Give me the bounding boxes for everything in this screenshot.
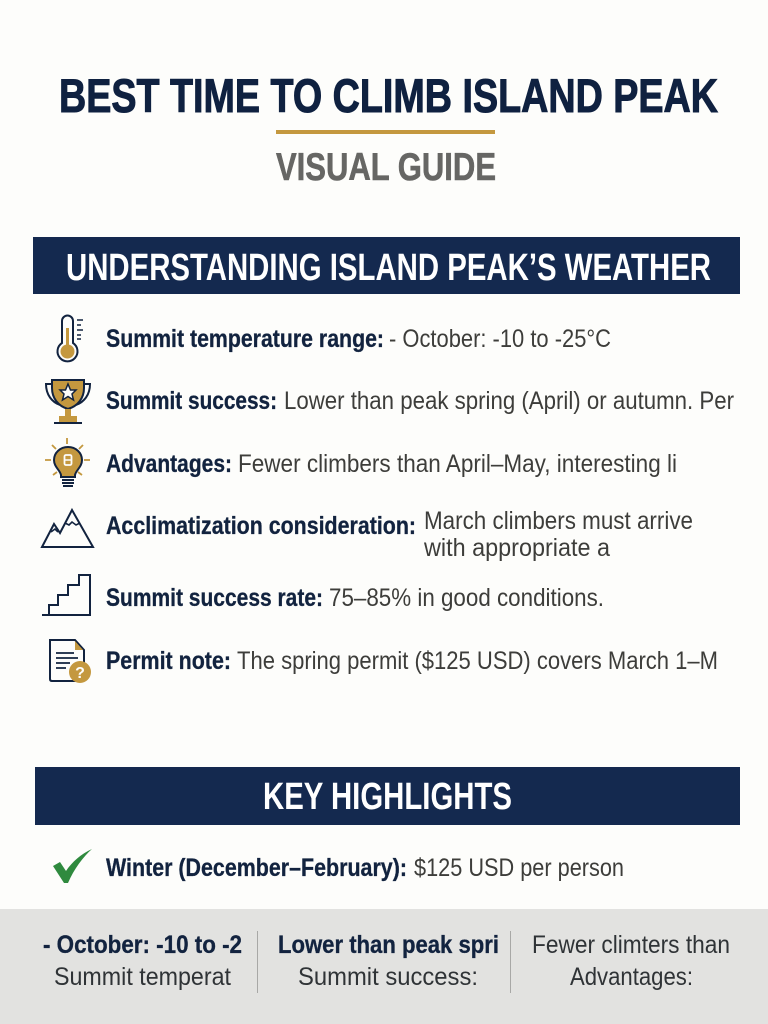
footer band <box>0 909 768 1024</box>
footer stat: summit temperature: - October: -10 to -2 <box>43 931 242 959</box>
row: advantages: Fewer climbers than April–May, interesting li <box>238 450 677 478</box>
highlight: winter permit cost <box>106 854 624 882</box>
section heading: key highlights: KEY HIGHLIGHTS <box>263 776 512 818</box>
icon: permit document <box>50 640 91 683</box>
footer stat: advantages <box>532 931 730 991</box>
row: permit note: The spring permit ($125 USD) covers March 1–M <box>237 647 718 675</box>
subtitle: VISUAL GUIDE <box>276 146 496 189</box>
row: acclimatization consideration <box>106 507 693 562</box>
row: acclimatization consideration: Acclimatization consideration: <box>106 512 416 540</box>
footer stat: summit success: Lower than peak spri <box>278 931 499 959</box>
title accent rule <box>276 130 495 134</box>
section heading: key highlights <box>35 767 740 825</box>
row: acclimatization consideration: with appropriate a <box>423 534 610 562</box>
row: summit success: Summit success: <box>106 387 277 415</box>
footer stat: summit temperature <box>43 931 242 991</box>
row: summit temperature range: - October: -10 to -25°C <box>389 325 611 353</box>
row: advantages: Advantages: <box>106 450 232 478</box>
row: acclimatization consideration: March climbers must arrive <box>424 507 693 535</box>
footer stat: advantages: Fewer climters than <box>532 931 730 959</box>
row: summit success rate <box>106 584 604 612</box>
footer stat: summit success: Summit success: <box>298 963 478 991</box>
icon: thermometer <box>58 316 83 361</box>
section heading: weather <box>33 237 740 294</box>
row: summit success rate: Summit success rate: <box>106 584 323 612</box>
row: summit success rate: 75–85% in good conditions. <box>329 584 604 612</box>
row: permit note: Permit note: <box>106 647 231 675</box>
highlight: winter permit cost: Winter (December–February): <box>106 854 407 882</box>
row: summit temperature range <box>106 325 611 353</box>
highlight: winter permit cost: $125 USD per person <box>414 854 624 882</box>
icon: stairs <box>42 575 90 615</box>
icon: trophy <box>46 380 90 423</box>
icon: permit document: ? <box>75 665 85 682</box>
row: summit temperature range: Summit temperature range: <box>106 325 384 353</box>
footer stat: summit success <box>278 931 499 991</box>
icon: green check <box>53 849 92 883</box>
row: summit success <box>106 387 734 415</box>
footer stat: advantages: Advantages: <box>570 963 693 991</box>
icon: mountain <box>42 510 93 547</box>
footer stat: summit temperature: Summit temperat <box>54 963 231 991</box>
icon: light bulb <box>45 438 90 486</box>
